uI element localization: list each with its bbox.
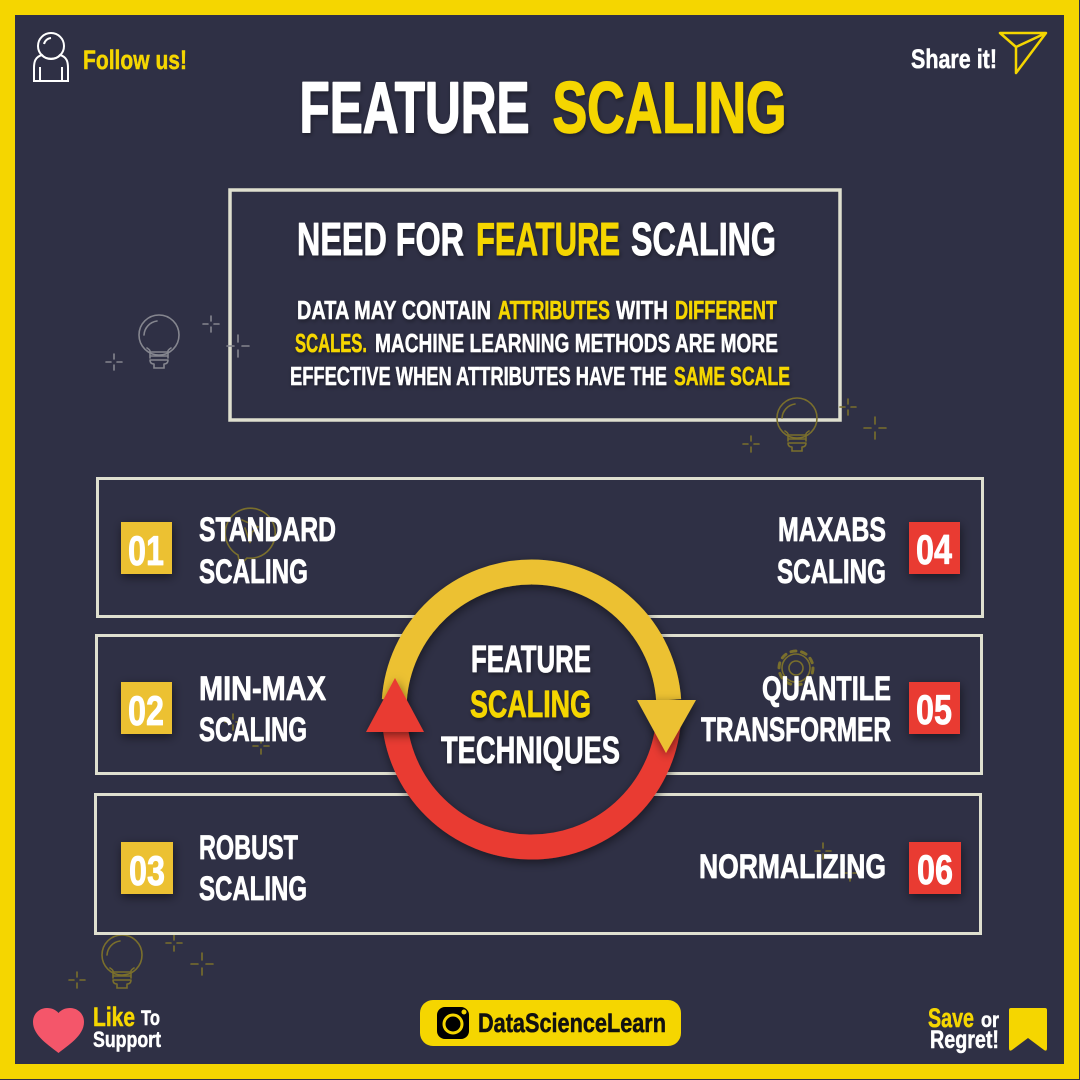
title: SCALING <box>552 68 786 148</box>
center label: SCALING <box>470 684 591 726</box>
decorative bulb icons <box>69 315 886 988</box>
save or regret label: Save <box>928 1003 974 1033</box>
panel: technique row 1 <box>98 478 982 616</box>
technique 03: 03 <box>129 847 165 894</box>
icon: paper plane <box>1000 33 1046 73</box>
save or regret label: or <box>981 1009 999 1032</box>
red arc <box>394 716 668 847</box>
instagram pill <box>420 1000 681 1046</box>
technique 02: 02 <box>128 687 164 734</box>
panel: technique row 3 <box>96 794 980 934</box>
icon: follow person <box>34 33 68 81</box>
panel heading: SCALING <box>631 213 776 265</box>
like to support label: Like <box>93 1002 135 1032</box>
technique 06: NORMALIZING <box>699 848 886 886</box>
follow us label: Follow us! <box>83 45 187 75</box>
technique 01 <box>121 511 336 591</box>
technique 02: MIN-MAX <box>199 670 326 708</box>
technique 05: TRANSFORMER <box>701 711 891 749</box>
icon: bookmark <box>1009 1008 1047 1051</box>
icon: instagram <box>437 1007 469 1039</box>
red arrowhead <box>366 678 424 732</box>
technique 01: STANDARD <box>199 511 336 549</box>
technique 04: MAXABS <box>778 511 886 549</box>
panel body text: ATTRIBUTES <box>498 295 610 325</box>
center label: FEATURE <box>471 639 591 681</box>
share it label: Share it! <box>911 44 997 74</box>
technique 02: SCALING <box>199 711 307 749</box>
panel: technique row 2 <box>96 636 982 774</box>
panel body text: DATA MAY CONTAIN <box>297 295 491 325</box>
panel body text: WITH <box>616 295 668 325</box>
panel body text <box>290 295 790 391</box>
technique 02 <box>121 670 326 749</box>
technique 01: 01 <box>128 527 164 574</box>
panel heading: FEATURE <box>476 213 620 265</box>
save or regret label <box>928 1003 999 1054</box>
technique 04: SCALING <box>777 553 886 591</box>
yellow arrowhead <box>637 700 696 753</box>
technique 06: 06 <box>917 846 953 893</box>
technique 04: 04 <box>916 526 952 573</box>
yellow arc <box>394 572 669 700</box>
technique 06 <box>699 842 961 894</box>
technique 03 <box>121 829 307 908</box>
panel body text: MACHINE LEARNING METHODS ARE MORE <box>375 328 778 358</box>
technique 03: ROBUST <box>199 829 298 867</box>
technique 05 <box>701 670 960 749</box>
panel heading <box>297 213 776 265</box>
icon: heart <box>33 1008 84 1053</box>
instagram pill: DataScienceLearn <box>478 1008 666 1038</box>
technique 05: QUANTILE <box>762 670 891 708</box>
save or regret label: Regret! <box>930 1026 999 1054</box>
center label: TECHNIQUES <box>441 730 620 772</box>
like to support label: Support <box>93 1027 162 1052</box>
like to support label <box>93 1002 162 1052</box>
panel heading: NEED FOR <box>297 213 464 265</box>
technique 04 <box>777 511 960 591</box>
panel: need for feature scaling <box>230 190 840 420</box>
panel body text: SAME SCALE <box>674 361 790 391</box>
technique 01: SCALING <box>199 553 308 591</box>
technique 03: SCALING <box>199 870 307 908</box>
title <box>300 68 786 148</box>
panel body text: EFFECTIVE WHEN ATTRIBUTES HAVE THE <box>290 361 667 391</box>
like to support label: To <box>141 1007 160 1030</box>
title: FEATURE <box>300 68 530 148</box>
panel body text: SCALES. <box>295 328 367 358</box>
circular diagram <box>366 572 696 847</box>
panel body text: DIFFERENT <box>675 295 777 325</box>
technique 05: 05 <box>916 686 952 733</box>
center label <box>441 639 620 772</box>
